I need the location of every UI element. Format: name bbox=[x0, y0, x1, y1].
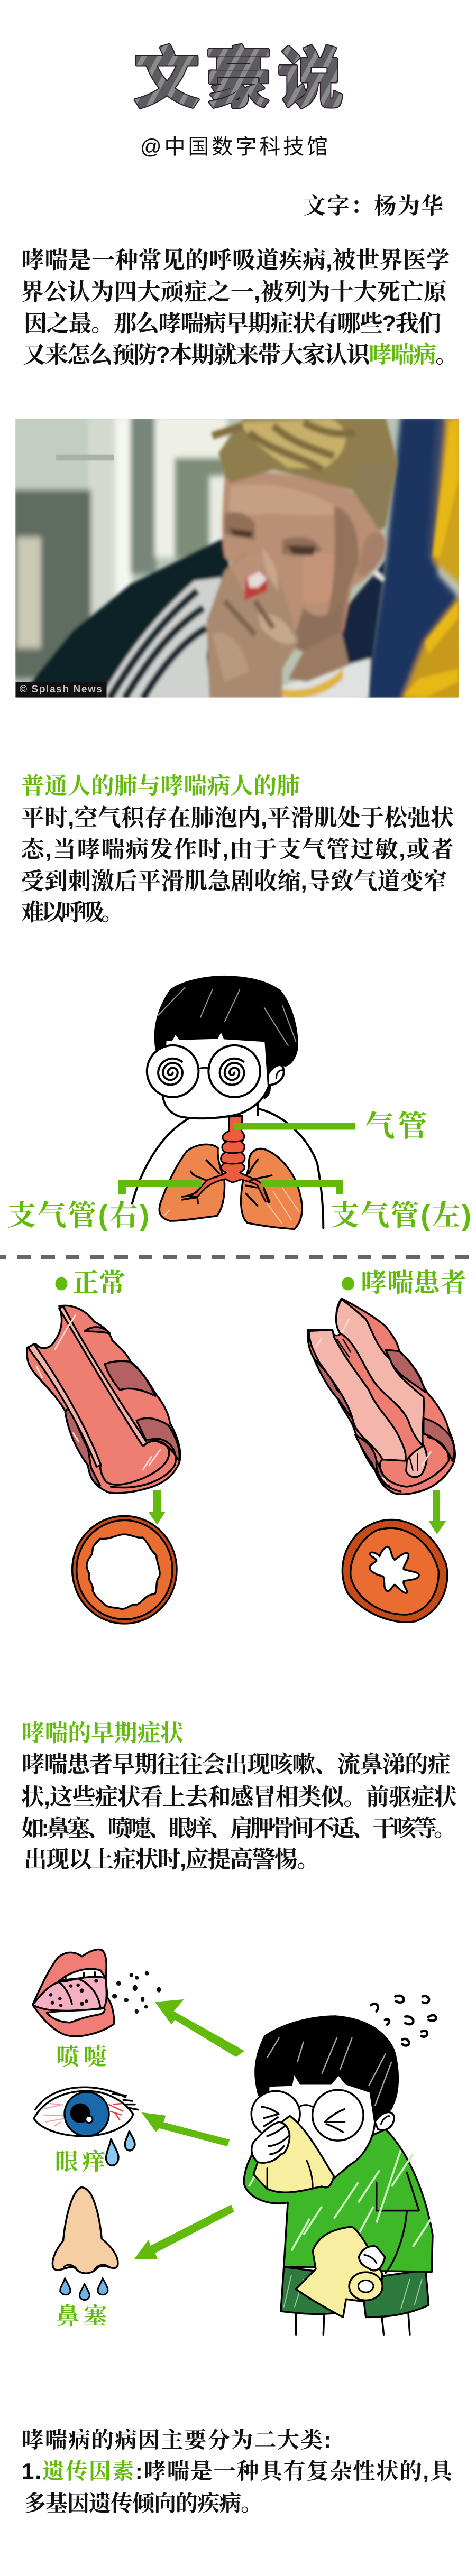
illustration: boy with lungs and trachea bbox=[132, 976, 323, 1229]
title: 文豪说 bbox=[134, 43, 343, 116]
cross section: normal bbox=[72, 1516, 177, 1624]
text block: causes: 1.遗传因素:哮喘是一种具有复杂性状的,具 bbox=[22, 2459, 455, 2484]
text block: early symptoms bbox=[21, 1752, 457, 1873]
illustration: sneezing boy bbox=[244, 1996, 436, 2334]
label: itchy eye: 眼痒 bbox=[55, 2149, 105, 2175]
legs bbox=[296, 2313, 410, 2334]
body outline bbox=[132, 1105, 323, 1228]
text block: causes: 多基因遗传倾向的疾病。 bbox=[24, 2491, 263, 2516]
text block: early symptoms: 出现以上症状时,应提高警惕。 bbox=[24, 1847, 320, 1873]
arrow: to eye bbox=[144, 2114, 228, 2145]
label: stuffy nose: 鼻塞 bbox=[56, 2303, 107, 2329]
face bbox=[162, 1030, 269, 1118]
text block: intro: 哮喘是一种常见的呼吸道疾病,被世界医学 bbox=[21, 247, 450, 273]
hair bbox=[154, 976, 298, 1099]
label: sneezing: 喷嚏 bbox=[56, 2044, 107, 2070]
icon: stuffy nose bbox=[52, 2188, 118, 2300]
ear bbox=[375, 2112, 394, 2130]
text block: intro: 因之最。那么哮喘病早期症状有哪些?我们 bbox=[24, 311, 441, 337]
shirt bbox=[244, 2129, 433, 2272]
text block: lungs explanation bbox=[21, 805, 454, 925]
text block: early symptoms: 状,这些症状看上去和感冒相类似。前驱症状 bbox=[21, 1784, 457, 1810]
text block: lungs explanation: 受到刺激后平滑肌急剧收缩,导致气道变窄 bbox=[21, 868, 447, 894]
arrow: to nose bbox=[136, 2206, 233, 2258]
text block: lungs explanation: 平时,空气积存在肺泡内,平滑肌处于松弛状 bbox=[21, 805, 454, 831]
text block: early symptoms: 如:鼻塞、喷嚏、眼痒、肩胛骨间不适、干咳等。 bbox=[21, 1815, 457, 1841]
toilet roll bbox=[296, 2227, 382, 2317]
arrow: to mouth bbox=[160, 2003, 240, 2054]
text block: lungs explanation: 态,当哮喘病发作时,由于支气管过敏,或者 bbox=[21, 837, 454, 863]
hair bbox=[254, 2015, 399, 2126]
hand at nose bbox=[252, 2122, 289, 2163]
trachea bbox=[182, 1116, 272, 1206]
glasses with spiral eyes bbox=[147, 1045, 260, 1097]
title: 文豪说 bbox=[134, 43, 343, 116]
ear bbox=[269, 1065, 284, 1085]
byline: 文字：杨为华 bbox=[304, 193, 443, 218]
heading: early symptoms: 哮喘的早期症状 bbox=[22, 1720, 184, 1746]
illustration: normal bronchus bbox=[27, 1305, 180, 1493]
label: normal: 正常 bbox=[72, 1268, 125, 1298]
icon: mouth sneezing bbox=[33, 1949, 161, 2036]
text block: intro: 界公认为四大顽症之一,被列为十大死亡原 bbox=[21, 279, 448, 305]
text block: causes: 哮喘病的病因主要分为二大类: bbox=[22, 2427, 331, 2452]
arrow: asthma bbox=[428, 1490, 446, 1534]
tissue at nose bbox=[253, 2116, 334, 2192]
icon: itchy eye bbox=[34, 2087, 138, 2165]
arrow: normal bbox=[148, 1490, 166, 1525]
text block: intro bbox=[21, 247, 459, 368]
photo: man using an inhaler bbox=[12, 415, 464, 702]
callout bar: trachea bbox=[234, 1123, 355, 1130]
text block: early symptoms: 哮喘患者早期往往会出现咳嗽、流鼻涕的症 bbox=[22, 1752, 451, 1777]
callout bar: right bronchus bbox=[118, 1180, 202, 1194]
text block: lungs explanation: 难以呼吸。 bbox=[21, 900, 124, 925]
label: trachea: 气管 bbox=[365, 1109, 427, 1143]
label: asthma patient: 哮喘患者 bbox=[361, 1268, 466, 1298]
photo caption: © Splash News bbox=[20, 684, 102, 695]
lungs bbox=[159, 1144, 302, 1229]
illustration: asthma bronchus bbox=[308, 1299, 455, 1494]
callout bar: left bronchus bbox=[261, 1180, 343, 1194]
subtitle: credit: @中国数字科技馆 bbox=[140, 135, 328, 159]
hand on roll bbox=[359, 2246, 385, 2271]
glasses and squeezed eyes bbox=[251, 2090, 363, 2141]
label: right bronchus: 支气管(右) bbox=[7, 1200, 149, 1231]
sweat marks bbox=[371, 1996, 436, 2046]
text block: causes bbox=[22, 2427, 455, 2516]
text block: intro: 又来怎么预防?本期就来带大家认识哮喘病。 bbox=[23, 342, 459, 368]
face bbox=[269, 2073, 375, 2179]
pants bbox=[281, 2267, 334, 2314]
heading: lungs: 普通人的肺与哮喘病人的肺 bbox=[21, 773, 300, 799]
section divider bbox=[0, 1255, 476, 1259]
label: left bronchus: 支气管(左) bbox=[331, 1200, 471, 1231]
tears bbox=[106, 2131, 135, 2165]
cross section: asthma bbox=[342, 1520, 447, 1622]
